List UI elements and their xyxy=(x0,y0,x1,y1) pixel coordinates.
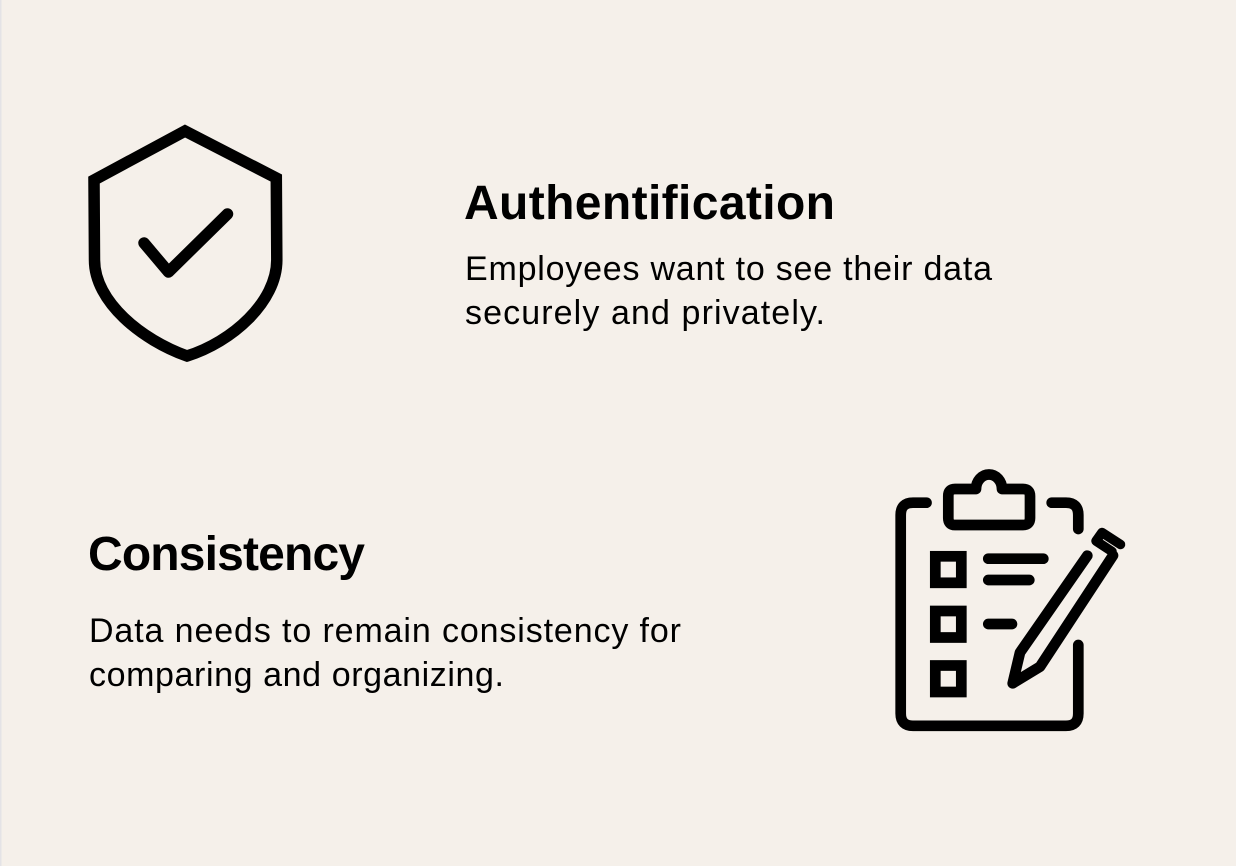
text block: consistency description: Data needs to remain consistency for xyxy=(89,612,681,650)
text block: authentification description xyxy=(465,250,992,332)
panel: authentification xyxy=(464,177,992,332)
checkbox 3 xyxy=(935,666,961,692)
heading: authentification: Authentification xyxy=(464,177,835,230)
text block: authentification description: securely and privately. xyxy=(465,294,825,332)
text block: consistency description: comparing and organizing. xyxy=(89,656,504,694)
pencil xyxy=(1013,556,1113,683)
text block: consistency description xyxy=(89,612,681,694)
clipboard clip xyxy=(948,474,1030,525)
panel: consistency xyxy=(88,528,681,694)
heading: consistency: Consistency xyxy=(88,528,365,581)
checkbox 1 xyxy=(935,556,961,583)
pencil cap xyxy=(1096,532,1120,552)
checklist lines xyxy=(988,559,1043,624)
icon: shield with check mark xyxy=(94,131,277,356)
checkbox 2 xyxy=(935,611,961,638)
clipboard board top right corner xyxy=(1052,503,1078,529)
clipboard board outline xyxy=(901,503,1078,726)
icon: clipboard checklist with pencil xyxy=(901,474,1120,726)
text block: authentification description: Employees want to see their data xyxy=(465,250,992,288)
